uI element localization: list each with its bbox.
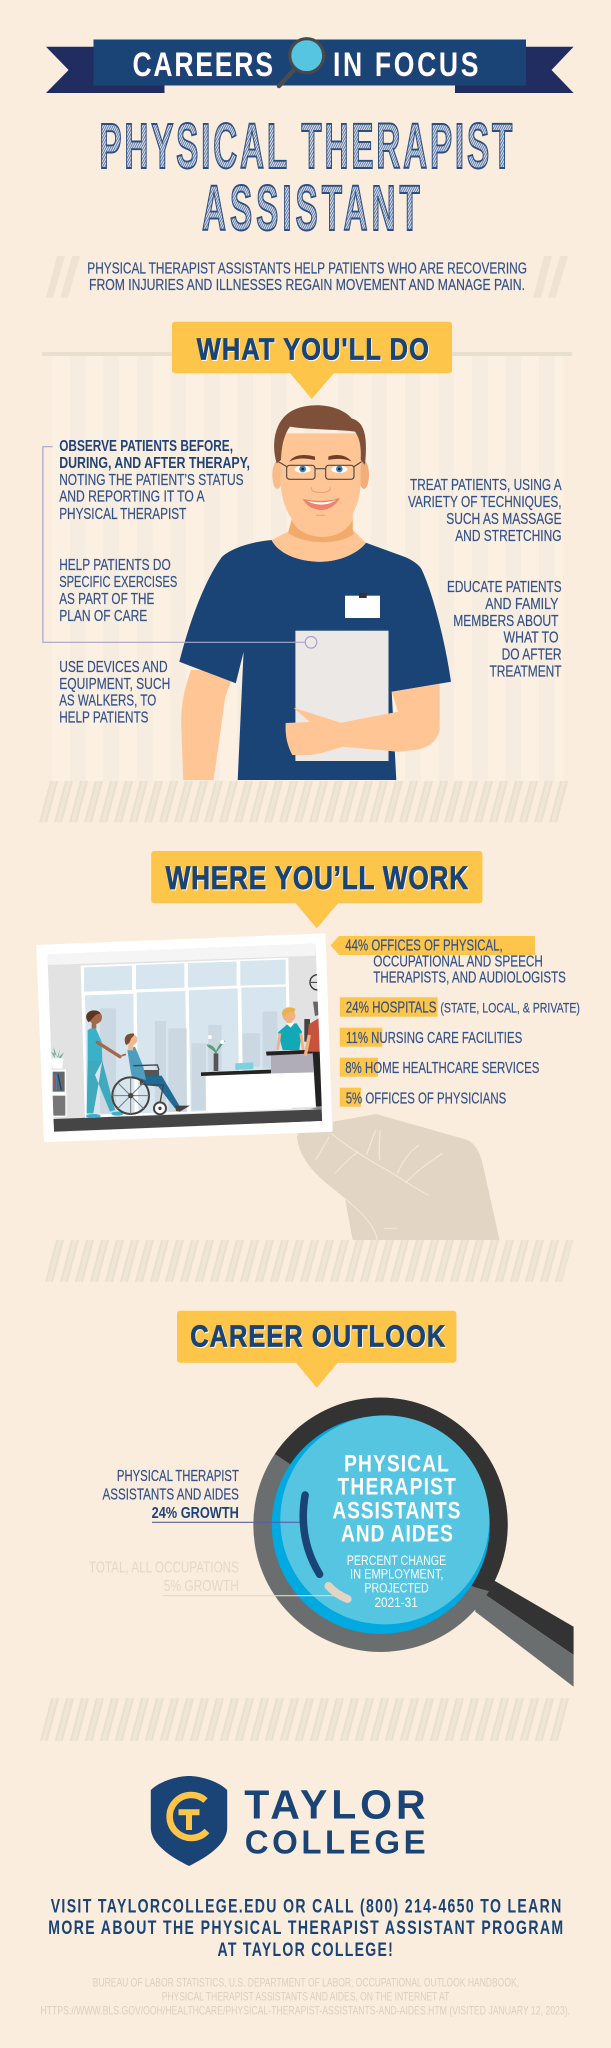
patient in wheelchair xyxy=(112,1033,190,1114)
text: help patients: PLAN OF CARE xyxy=(59,608,147,625)
24 percent row xyxy=(340,997,580,1017)
text: treat patients: VARIETY OF TECHNIQUES, xyxy=(408,494,562,511)
heading: what you'll do xyxy=(172,322,452,399)
nurse xyxy=(86,1010,126,1118)
heading: career outlook xyxy=(177,1311,456,1388)
face xyxy=(272,405,369,532)
hatched divider 1 xyxy=(39,781,573,822)
text: observe patients: OBSERVE PATIENTS BEFORE, xyxy=(59,438,233,455)
text: help patients: HELP PATIENTS DO xyxy=(59,557,171,574)
text: educate patients xyxy=(447,579,562,681)
text: educate patients: DO AFTER xyxy=(502,647,562,664)
text: educate patients: AND FAMILY xyxy=(485,596,558,613)
lens text: AND AIDES xyxy=(341,1520,453,1547)
callout line xyxy=(43,447,317,648)
employment list xyxy=(330,936,580,1107)
text: help patients xyxy=(59,557,177,625)
lens text: PROJECTED xyxy=(364,1580,429,1596)
magnifying glass xyxy=(240,1380,574,1687)
call to action: MORE ABOUT THE PHYSICAL THERAPIST ASSISTANT PROGRAM xyxy=(48,1917,563,1939)
logo: Taylor College: TAYLOR xyxy=(244,1781,426,1827)
title xyxy=(99,110,512,244)
header ribbon: CAREERS xyxy=(132,46,273,84)
text: use devices xyxy=(59,659,170,727)
man in red xyxy=(304,974,322,1110)
clinic scene xyxy=(47,943,325,1132)
label: 5 percent growth xyxy=(89,1559,239,1595)
header ribbon xyxy=(46,39,574,93)
text: treat patients: AND STRETCHING xyxy=(455,528,562,545)
hatched divider 3 xyxy=(40,1698,573,1741)
lens text: PERCENT CHANGE xyxy=(347,1552,446,1568)
11 percent row: 11% NURSING CARE FACILITIES xyxy=(346,1030,522,1047)
heading: what you'll do: WHAT YOU'LL DO xyxy=(197,332,429,367)
text: use devices: AS WALKERS, TO xyxy=(59,693,156,710)
growth arcs xyxy=(152,1495,348,1599)
label: 24 percent growth: 24% GROWTH xyxy=(152,1505,239,1522)
source references: PHYSICAL THERAPIST ASSISTANTS AND AIDES, ON THE INTERNET AT xyxy=(162,1989,450,2003)
call to action: VISIT TAYLORCOLLEGE.EDU OR CALL (800) 214-4650 TO LEARN xyxy=(51,1895,561,1917)
heading: where you'll work: WHERE YOU’LL WORK xyxy=(166,862,468,897)
text: help patients: AS PART OF THE xyxy=(59,591,154,608)
lens text xyxy=(332,1450,460,1610)
text: use devices: USE DEVICES AND xyxy=(59,659,168,676)
text: use devices: EQUIPMENT, SUCH xyxy=(59,676,170,693)
text: help patients: SPECIFIC EXERCISES xyxy=(59,574,177,591)
hatched divider 2 xyxy=(45,1240,573,1282)
lens text: THERAPIST xyxy=(338,1473,457,1500)
text: educate patients: TREATMENT xyxy=(490,664,562,681)
text: observe patients: AND REPORTING IT TO A xyxy=(59,489,205,506)
intro text xyxy=(46,256,568,298)
text: educate patients: WHAT TO xyxy=(504,630,558,647)
skyline xyxy=(100,1008,277,1114)
label: 5 percent growth: TOTAL, ALL OCCUPATIONS xyxy=(89,1559,239,1576)
text: treat patients: SUCH AS MASSAGE xyxy=(446,511,562,528)
badge xyxy=(345,596,380,618)
44 percent row: OCCUPATIONAL AND SPEECH xyxy=(373,954,543,971)
neck xyxy=(272,505,366,562)
heading: where you'll work xyxy=(151,851,482,928)
text: observe patients: PHYSICAL THERAPIST xyxy=(59,506,187,523)
label: 24 percent growth: ASSISTANTS AND AIDES xyxy=(102,1486,239,1503)
shelf and plant xyxy=(51,1047,67,1117)
receptionist xyxy=(278,1007,303,1050)
8 percent row xyxy=(340,1058,539,1077)
11 percent row xyxy=(340,1028,522,1047)
8 percent row: 8% HOME HEALTHCARE SERVICES xyxy=(345,1060,539,1077)
lens text: IN EMPLOYMENT, xyxy=(350,1566,444,1582)
text: treat patients: TREAT PATIENTS, USING A xyxy=(410,477,562,494)
title: PHYSICAL THERAPIST xyxy=(99,110,512,182)
5 percent row xyxy=(340,1088,506,1107)
illustration: therapist assistant xyxy=(179,405,451,780)
hand holding photo xyxy=(297,1114,500,1240)
source references xyxy=(40,1976,570,2017)
left arm xyxy=(181,670,235,780)
label: 5 percent growth: 5% GROWTH xyxy=(164,1578,239,1595)
text: educate patients: MEMBERS ABOUT xyxy=(453,613,559,630)
5 percent row: 5% OFFICES OF PHYSICIANS xyxy=(346,1090,506,1107)
heading: career outlook: CAREER OUTLOOK xyxy=(190,1319,446,1354)
call to action xyxy=(48,1895,563,1961)
text: treat patients xyxy=(408,477,562,545)
lens text: 2021-31 xyxy=(374,1594,418,1610)
clipboard xyxy=(295,631,388,761)
shirt xyxy=(179,540,451,780)
call to action: AT TAYLOR COLLEGE! xyxy=(218,1939,393,1961)
logo: Taylor College xyxy=(151,1776,426,1866)
header ribbon: IN FOCUS xyxy=(333,46,478,84)
vase and flowers xyxy=(207,1035,225,1071)
label: 24 percent growth xyxy=(102,1468,239,1522)
title: ASSISTANT xyxy=(202,172,420,244)
text: observe patients: DURING, AND AFTER THERAPY, xyxy=(59,455,250,472)
label: 24 percent growth: PHYSICAL THERAPIST xyxy=(117,1468,239,1485)
right arm and hand xyxy=(286,684,440,755)
lens text: ASSISTANTS xyxy=(332,1496,460,1524)
striped backdrop xyxy=(52,356,563,781)
photo card xyxy=(36,933,332,1142)
text: use devices: HELP PATIENTS xyxy=(59,710,149,727)
text: educate patients: EDUCATE PATIENTS xyxy=(447,579,562,596)
text: observe patients xyxy=(59,438,250,523)
logo: Taylor College: COLLEGE xyxy=(245,1823,426,1860)
44 percent row: 44% OFFICES OF PHYSICAL, xyxy=(345,938,503,955)
24 percent row: 24% HOSPITALS xyxy=(346,1000,436,1017)
44 percent row xyxy=(330,936,566,987)
text: observe patients: NOTING THE PATIENT’S STATUS xyxy=(59,472,244,489)
lens text: PHYSICAL xyxy=(344,1450,449,1477)
